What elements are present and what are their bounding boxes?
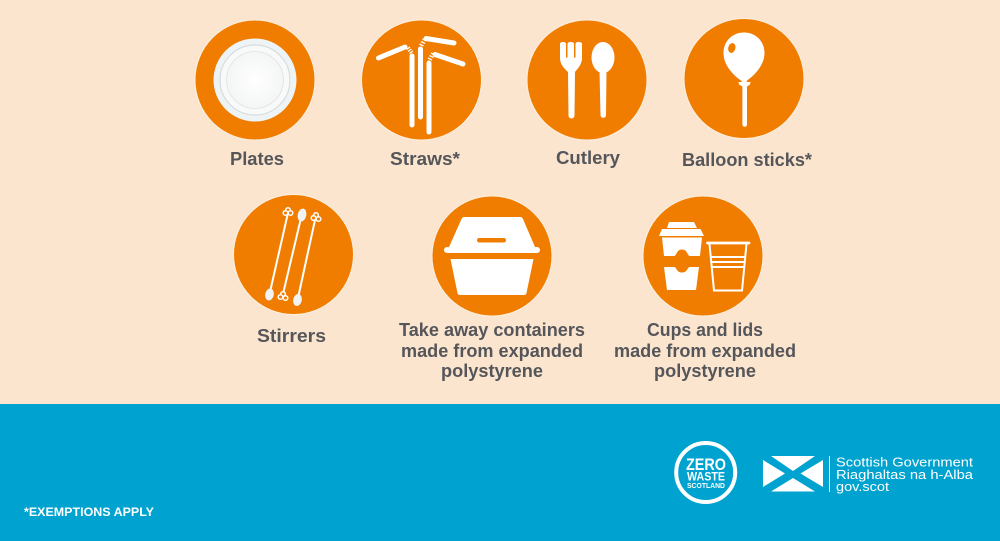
logo: Zero Waste Scotland: WASTE bbox=[687, 470, 725, 484]
icon: plates bbox=[195, 20, 315, 140]
label: take away containers bbox=[399, 320, 585, 381]
icon: stirrers bbox=[234, 194, 354, 314]
logo: Zero Waste Scotland: SCOTLAND bbox=[687, 481, 725, 490]
label: cups and lids: polystyrene bbox=[654, 361, 756, 381]
label: cups and lids bbox=[614, 320, 796, 381]
logo text: Scottish Government: Riaghaltas na h-Alba bbox=[836, 468, 973, 482]
label: cups and lids: Cups and lids bbox=[647, 320, 763, 340]
icon: take away container bbox=[432, 196, 552, 316]
logo text: Scottish Government bbox=[836, 456, 974, 494]
logo divider bbox=[829, 456, 830, 492]
label: cups and lids: made from expanded bbox=[614, 341, 796, 361]
logo: Scottish Government saltire bbox=[763, 456, 823, 492]
label: take away containers: polystyrene bbox=[441, 361, 543, 381]
icon: balloon stick bbox=[684, 18, 804, 138]
logo text: Scottish Government: gov.scot bbox=[836, 480, 890, 494]
footnote: *EXEMPTIONS APPLY bbox=[24, 505, 154, 519]
logo: Zero Waste Scotland bbox=[676, 443, 735, 502]
label: plates: Plates bbox=[230, 149, 284, 169]
label: balloon sticks: Balloon sticks* bbox=[682, 150, 812, 170]
icon: cutlery bbox=[527, 20, 647, 140]
icon: cups and lids bbox=[643, 196, 763, 316]
label: stirrers: Stirrers bbox=[257, 326, 326, 346]
footer band bbox=[0, 404, 1000, 541]
logo text: Scottish Government: Scottish Government bbox=[836, 456, 974, 470]
label: cutlery: Cutlery bbox=[556, 148, 620, 168]
label: take away containers: Take away containers bbox=[399, 320, 585, 340]
icon: straws bbox=[362, 20, 482, 140]
label: straws: Straws* bbox=[390, 149, 460, 169]
background bbox=[0, 0, 1000, 404]
label: take away containers: made from expanded bbox=[401, 341, 583, 361]
logo: Zero Waste Scotland: ZERO bbox=[686, 456, 726, 474]
